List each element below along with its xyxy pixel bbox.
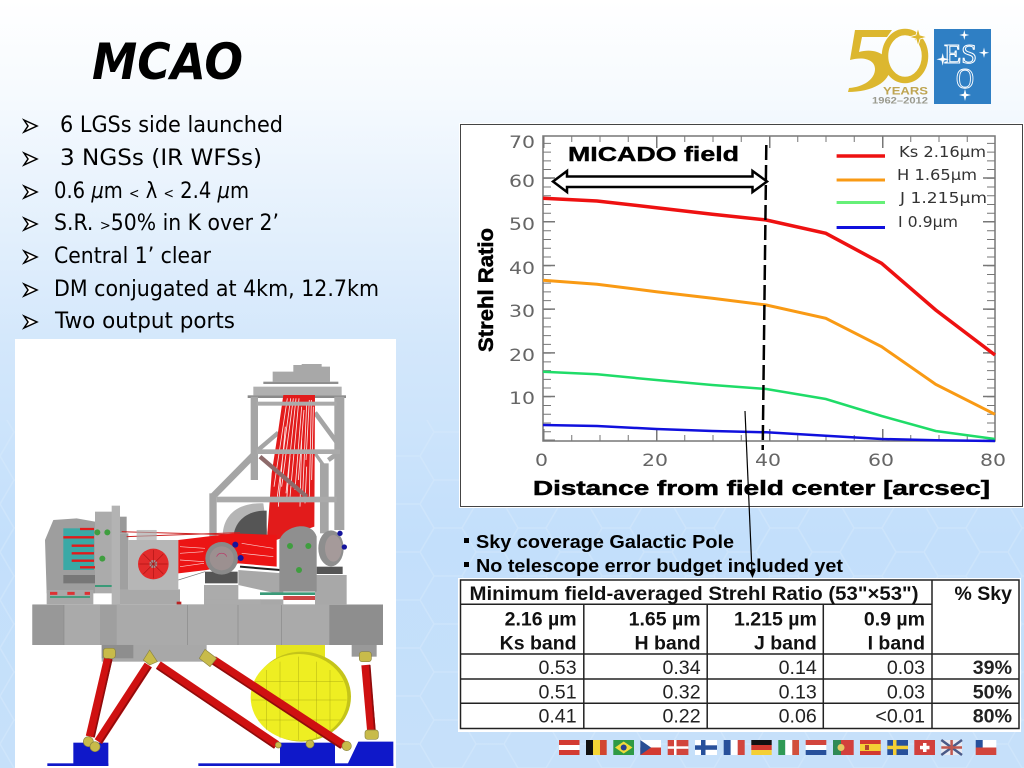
x axis numbers: 40 <box>755 451 781 471</box>
bullet list: MCAO specifications <box>24 113 379 334</box>
red hexapod struts <box>90 658 375 748</box>
table header: Minimum field-averaged Strehl Ratio (53"×53") <box>470 583 918 605</box>
logo: gold 50 <box>848 28 928 106</box>
right gray panel with green dots <box>204 526 317 605</box>
table header <box>470 583 1012 654</box>
bullet: 3 NGSs: 3 NGSs (IR WFSs) <box>60 146 262 171</box>
bullet: wavelength range: 0.6 µm < λ < 2.4 µm <box>54 179 249 204</box>
flag: Finland <box>695 740 717 755</box>
bullet: 6 LGSs: 6 LGSs side launched <box>60 113 283 138</box>
chart axes and ticks <box>543 136 995 441</box>
panel: instrument illustration <box>15 339 396 768</box>
strut joints <box>83 648 378 752</box>
table header: Ks band <box>500 632 577 654</box>
y axis numbers: 20 <box>509 346 535 366</box>
table header: 0.9 µm <box>864 608 925 630</box>
table row: 39%: 0.14 <box>779 657 817 679</box>
table row: 50%: 0.03 <box>887 681 925 703</box>
notes about sky coverage <box>464 532 843 576</box>
right mirror wheel <box>315 530 347 605</box>
flag: Sweden <box>887 740 908 755</box>
flag: Switzerland <box>914 740 935 755</box>
x axis numbers: 20 <box>642 451 668 471</box>
left mirror wheel <box>204 542 244 605</box>
table row: 80% <box>538 705 1012 727</box>
table row: 80%: 0.06 <box>779 705 817 727</box>
red beam bundle <box>178 533 277 580</box>
y axis numbers: 30 <box>509 302 535 322</box>
flag: Belgium <box>586 740 607 755</box>
table header: 2.16 µm <box>505 608 577 630</box>
flag: Germany <box>751 740 772 755</box>
curve: H band <box>543 280 995 414</box>
table row: 50% <box>538 681 1012 703</box>
table row: 39%: 0.03 <box>887 657 925 679</box>
arrow from chart to table <box>745 411 756 578</box>
y axis title: Strehl Ratio <box>475 228 498 352</box>
x axis numbers <box>535 451 1006 471</box>
table row: 80%: <0.01 <box>875 705 925 727</box>
notes about sky coverage: No telescope error budget included yet <box>476 556 843 576</box>
table header: 1.65 µm <box>629 608 701 630</box>
flag: Portugal <box>833 740 854 755</box>
y axis numbers: 60 <box>509 172 535 192</box>
x axis numbers: 80 <box>980 451 1006 471</box>
legend <box>837 143 987 231</box>
table row: 80%: 80% <box>973 705 1012 727</box>
x axis title: Distance from field center [arcsec] <box>533 478 990 500</box>
bullet: output ports: Two output ports <box>54 309 235 334</box>
logo: ESO 50 years <box>848 28 991 106</box>
table row: 50%: 0.13 <box>779 681 817 703</box>
flag: Netherlands <box>806 740 826 755</box>
y axis numbers: 70 <box>509 133 535 153</box>
legend: J 1.215μm <box>899 189 987 207</box>
table row: 80%: 0.22 <box>662 705 701 727</box>
MICADO field label: MICADO field <box>568 143 739 166</box>
blue base blocks <box>47 742 393 766</box>
flag: Italy <box>778 740 799 755</box>
table row: 50%: 0.32 <box>662 681 701 703</box>
bullet: central clear: Central 1’ clear <box>54 244 212 269</box>
flag: Austria <box>559 740 580 755</box>
dome <box>223 503 268 540</box>
table row: 39%: 0.53 <box>538 657 577 679</box>
tower frame with laser beams <box>209 364 346 543</box>
flag: Czech Republic <box>640 740 661 755</box>
table row: 80%: 0.41 <box>538 705 577 727</box>
y axis numbers: 40 <box>509 259 535 279</box>
table row: 39% <box>538 657 1012 679</box>
MICADO field dashed limit <box>763 145 766 450</box>
x axis numbers: 0 <box>535 451 548 471</box>
logo: gold 50: 1962–2012 <box>872 96 928 106</box>
yellow sphere <box>251 645 351 742</box>
bench plate <box>32 604 383 662</box>
flag: Brazil <box>613 740 634 755</box>
table row: 39%: 39% <box>973 657 1012 679</box>
bullet: DM conjugation: DM conjugated at 4km, 12.7km <box>54 277 379 302</box>
table row: 39%: 0.34 <box>662 657 701 679</box>
y axis numbers: 50 <box>509 215 535 235</box>
notes about sky coverage: Sky coverage Galactic Pole <box>476 532 734 552</box>
legend: I 0.9μm <box>898 213 958 231</box>
flag: France <box>724 740 745 755</box>
curve: J band <box>543 372 995 439</box>
panel: Strehl ratio chart <box>459 123 1024 508</box>
table: minimum field-averaged Strehl ratio <box>458 578 1021 732</box>
bullet: Strehl ratio: S.R. >50% in K over 2’ <box>54 211 279 236</box>
table row: 50%: 50% <box>973 681 1012 703</box>
table header: J band <box>754 632 817 654</box>
table row: 50%: 0.51 <box>538 681 577 703</box>
title: MCAO <box>92 33 243 91</box>
MICADO field double arrow <box>553 171 767 192</box>
central box with red disc <box>120 530 240 605</box>
legend: H 1.65μm <box>897 166 977 184</box>
flag: Spain <box>860 740 881 755</box>
table header: H band <box>635 632 701 654</box>
curve: Ks band <box>543 198 995 355</box>
flag: Chile <box>976 740 996 755</box>
table grid <box>460 580 1019 728</box>
logo: ESO blue square <box>934 29 991 104</box>
curve: I band <box>543 425 995 441</box>
logo: gold 50: YEARS <box>883 86 928 98</box>
table header: I band <box>868 632 925 654</box>
flag: United Kingdom <box>941 740 962 755</box>
flags of member states <box>559 740 996 755</box>
y axis numbers <box>509 133 535 409</box>
legend: Ks 2.16μm <box>899 143 986 161</box>
left optics module <box>45 506 127 605</box>
logo: ESO blue square: ES <box>944 39 977 69</box>
wedge under beam <box>238 570 283 595</box>
table header: % Sky <box>955 583 1012 605</box>
flag: Denmark <box>668 740 688 755</box>
y axis numbers: 10 <box>509 389 535 409</box>
table header: 1.215 µm <box>734 608 817 630</box>
logo: ESO blue square: O <box>956 63 974 95</box>
x axis numbers: 60 <box>868 451 894 471</box>
